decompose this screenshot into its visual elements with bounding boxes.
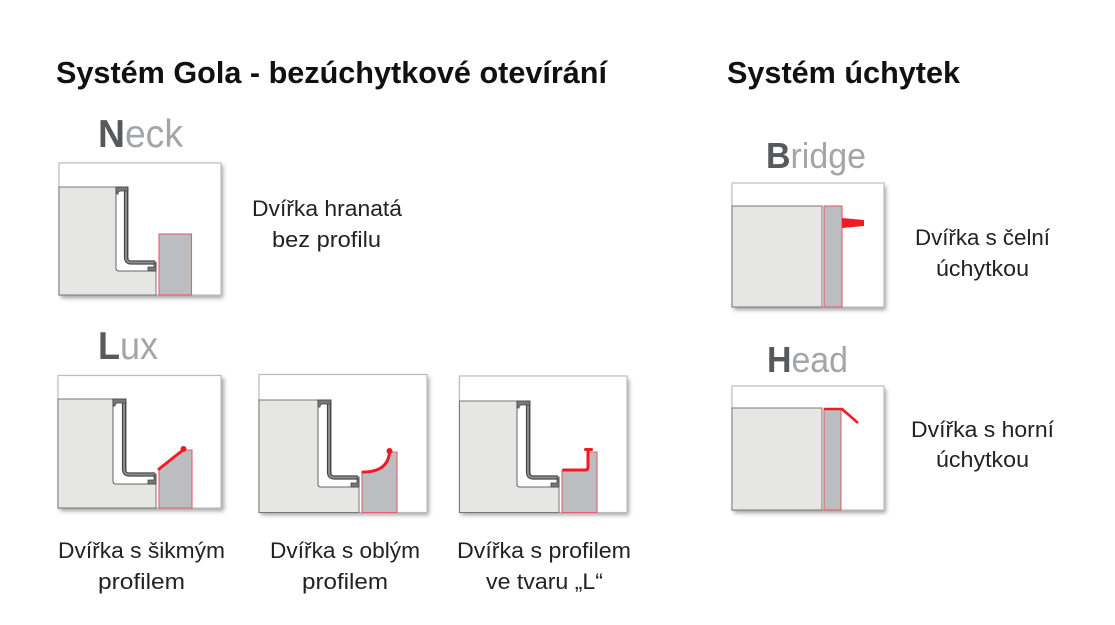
diagram: Bridge handle — [732, 183, 886, 310]
description: Bridge: Dvířka s čelní — [915, 225, 1051, 250]
description: Head: Dvířka s horní — [911, 417, 1055, 442]
description: Bridge: úchytkou — [936, 256, 1029, 281]
panel: Neck — [59, 113, 223, 298]
label: Bridge: Bridge — [766, 135, 866, 176]
description: slanted profile: profilem — [98, 569, 185, 594]
panel: Lux rounded profile — [259, 374, 429, 515]
label: Neck: Neck — [98, 113, 183, 156]
description: rounded profile: profilem — [302, 569, 388, 594]
panel: Bridge — [732, 135, 886, 310]
icon: red slanted profile — [159, 446, 186, 469]
diagram: Head handle — [732, 386, 886, 513]
description: Head: úchytkou — [936, 447, 1029, 472]
description: Bridge — [915, 225, 1051, 281]
description: L profile: ve tvaru „L“ — [486, 569, 603, 594]
label: Lux: Lux — [98, 325, 158, 368]
description: Neck: bez profilu — [272, 227, 381, 252]
description: L profile — [457, 538, 631, 594]
panel: Lux L profile — [460, 376, 629, 515]
panel: Head — [732, 339, 886, 513]
description: rounded profile: Dvířka s oblým — [270, 538, 420, 563]
heading: Systém úchytek: Systém úchytek — [727, 55, 961, 90]
description: Neck — [252, 196, 402, 252]
icon: red rounded profile — [363, 448, 392, 472]
heading: Systém Gola: Systém Gola - bezúchytkové otevírání — [56, 55, 608, 90]
description: slanted profile — [58, 538, 225, 594]
description: Neck: Dvířka hranatá — [252, 196, 402, 221]
panel: Lux slanted profile — [58, 376, 224, 511]
description: slanted profile: Dvířka s šikmým — [58, 538, 225, 563]
description: Head — [911, 417, 1055, 472]
icon: red L profile — [564, 450, 592, 470]
description: rounded profile — [270, 538, 420, 594]
diagram: Neck profile — [59, 163, 223, 298]
label: Head: Head — [767, 339, 848, 380]
description: L profile: Dvířka s profilem — [457, 538, 631, 563]
